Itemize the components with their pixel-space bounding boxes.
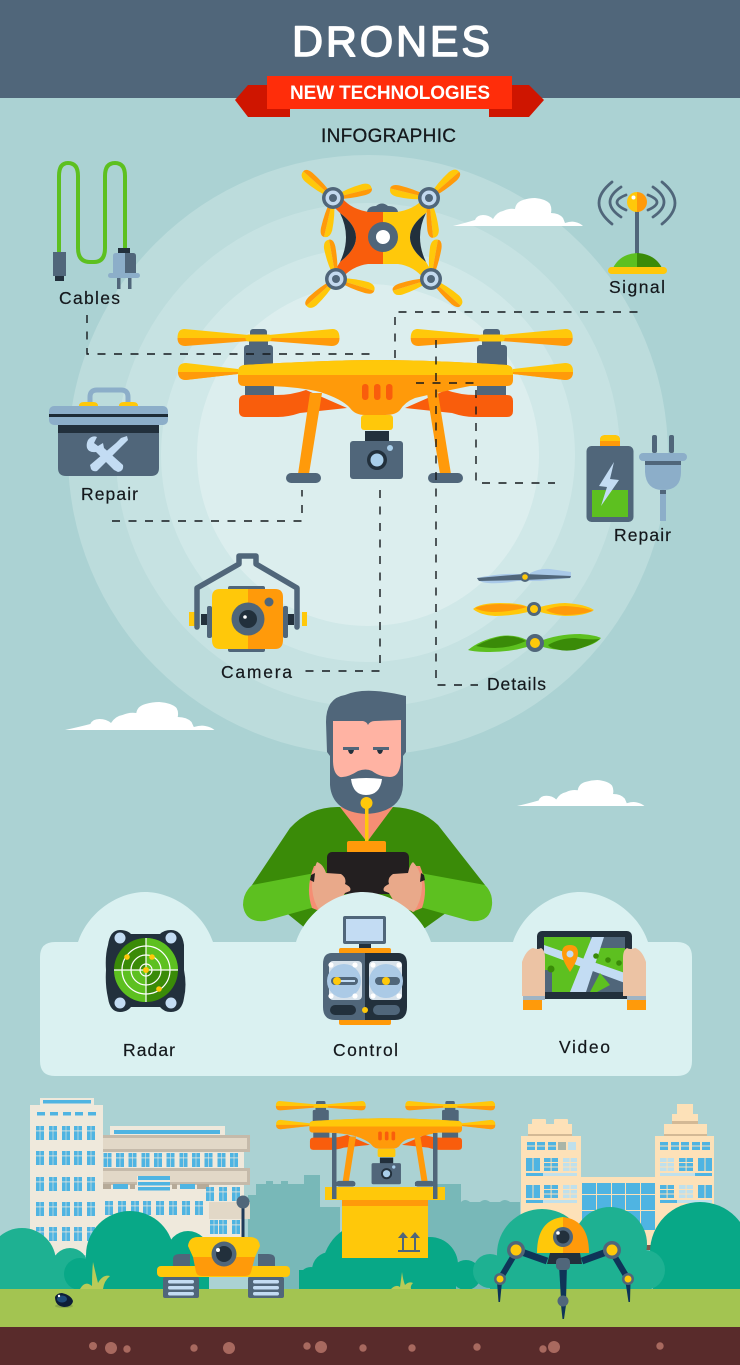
smile: [351, 778, 382, 795]
building: left tower: [30, 1098, 103, 1255]
panel: controls: [40, 892, 692, 1076]
cloud middle right: [517, 780, 644, 806]
header band: [0, 0, 740, 98]
small beetle robot: [55, 1293, 73, 1308]
icon: battery and plug: [586, 435, 687, 522]
icon: control unit: [323, 916, 407, 1025]
icon: gimbal camera: [189, 556, 307, 652]
building: left annex: [103, 1126, 250, 1245]
label: signal: Signal: [609, 277, 665, 297]
neck: [340, 807, 393, 842]
hair: [326, 691, 406, 760]
cloud top right: [453, 198, 583, 226]
controller: [327, 852, 409, 894]
spider robot: [494, 1217, 634, 1319]
dashed connector lines: [87, 312, 640, 685]
icon: spare propellers: [468, 569, 601, 652]
right forearm: [420, 873, 492, 921]
face: [333, 720, 401, 777]
pilot with remote control: [243, 691, 492, 928]
icon: signal tower: [599, 182, 675, 274]
concentric circle backdrop: [68, 155, 668, 755]
main drone: [178, 329, 573, 483]
label: details: Details: [487, 674, 546, 694]
label: video: Video: [559, 1037, 610, 1057]
label: control: Control: [333, 1040, 398, 1060]
parcel: [325, 1133, 445, 1258]
eyes: [343, 747, 389, 754]
left forearm: [243, 873, 315, 921]
shirt: [252, 807, 485, 928]
right hand: [384, 862, 425, 912]
left hand: [309, 862, 350, 912]
antenna: [347, 797, 386, 853]
icon: toolbox: [49, 390, 168, 476]
label: radar: Radar: [123, 1040, 175, 1060]
label: camera: Camera: [221, 662, 292, 682]
label: battery repair: Repair: [614, 525, 671, 545]
title: DRONES: [292, 18, 490, 66]
label: repair kit: Repair: [81, 484, 138, 504]
ribbon banner: [235, 76, 544, 117]
building: right complex: [521, 1104, 714, 1250]
soil with pebbles: [0, 1327, 740, 1365]
icon: cables: [53, 163, 140, 289]
beard: [330, 752, 403, 814]
grass tufts: [80, 1262, 413, 1289]
ribbon banner: NEW TECHNOLOGIES: [290, 83, 490, 104]
icon: video tablet: [522, 931, 646, 1010]
delivery drone: [276, 1101, 495, 1186]
rover robot: [157, 1196, 290, 1298]
label: cables: Cables: [59, 288, 120, 308]
background castle: [248, 1175, 520, 1289]
icon: radar: [106, 930, 186, 1012]
top-view drone: [299, 167, 465, 311]
ground grass: [0, 1289, 740, 1327]
cloud middle left: [65, 702, 214, 730]
subtitle: INFOGRAPHIC: [321, 126, 456, 147]
bushes: [0, 1202, 740, 1318]
